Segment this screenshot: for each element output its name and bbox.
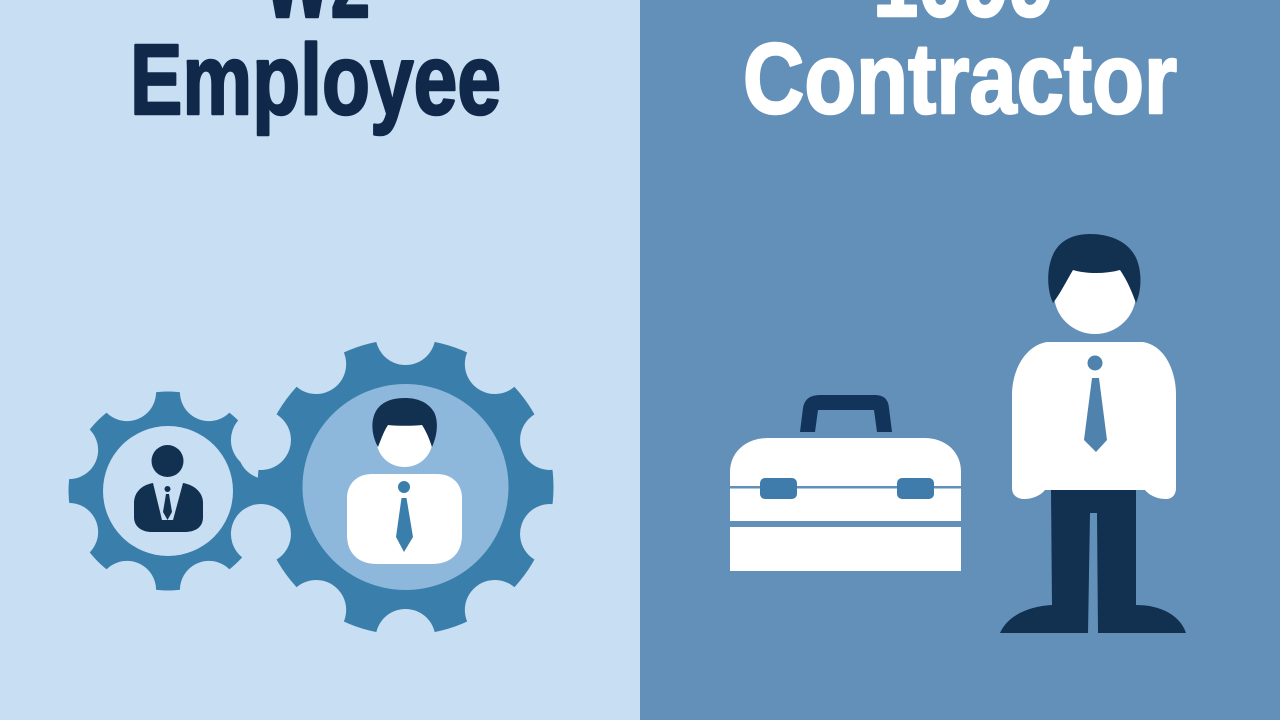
panel: 1099 contractor — [640, 0, 1280, 720]
icon: small gear with suited person — [31, 354, 305, 628]
panel: W2 employee — [0, 0, 640, 720]
icon: toolbox — [730, 395, 961, 571]
icon: contractor figure — [1000, 234, 1186, 633]
heading: W2 Employee: Employee — [130, 24, 501, 136]
heading: W2 Employee — [130, 0, 501, 136]
icon: large gear with person — [223, 305, 588, 669]
heading: 1099 Contractor: Contractor — [743, 23, 1177, 135]
